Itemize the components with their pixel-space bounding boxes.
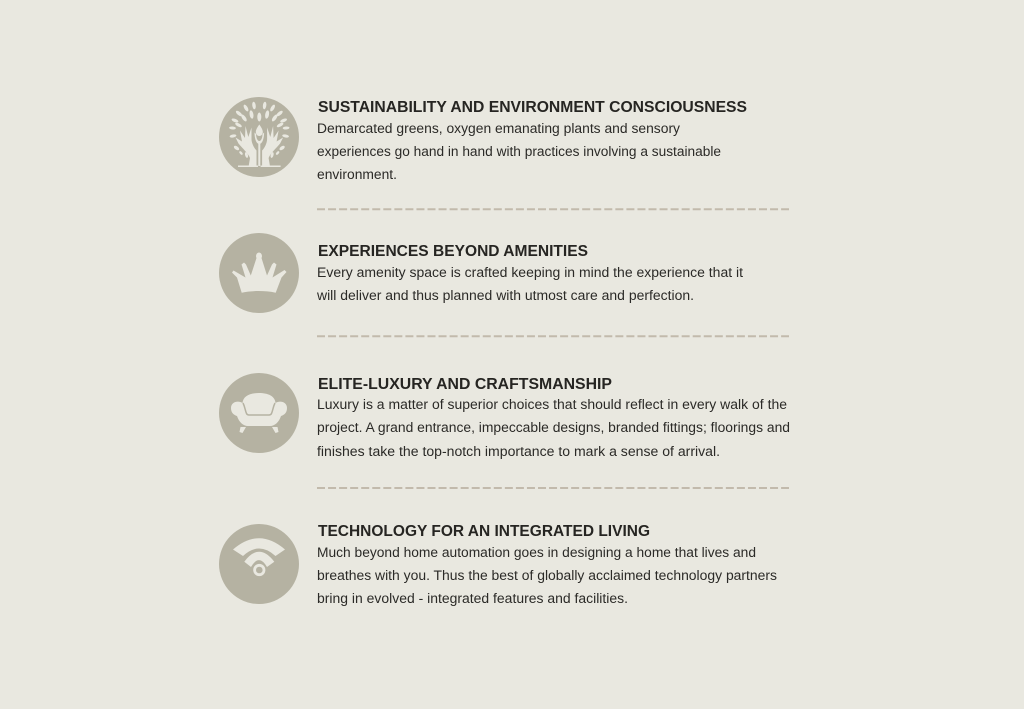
body text: Luxury is a matter of superior choices that should reflect in every walk of the: [317, 397, 787, 412]
body text: will deliver and thus planned with utmost care and perfection.: [316, 288, 694, 303]
panel: craftsmanship: [219, 373, 790, 459]
heading: TECHNOLOGY FOR AN INTEGRATED LIVING: [318, 523, 650, 540]
body text: Every amenity space is crafted keeping in mind the experience that it: [317, 265, 743, 280]
icon: wifi: [219, 524, 299, 604]
body text: [316, 265, 743, 303]
heading: ELITE-LUXURY AND CRAFTSMANSHIP: [318, 376, 612, 393]
body text: [317, 545, 777, 606]
body text: bring in evolved - integrated features and facilities.: [317, 591, 628, 606]
body text: [317, 397, 790, 459]
body text: experiences go hand in hand with practices involving a sustainable: [317, 144, 721, 159]
panel: experiences: [219, 233, 743, 313]
body text: finishes take the top-notch importance to mark a sense of arrival.: [317, 444, 720, 459]
icon: crown: [219, 233, 299, 313]
panel: technology: [219, 523, 777, 606]
panel: sustainability: [219, 97, 747, 182]
body text: project. A grand entrance, impeccable designs, branded fittings; floorings and: [317, 420, 790, 435]
body text: Much beyond home automation goes in designing a home that lives and: [317, 545, 756, 560]
body text: [317, 121, 721, 182]
body text: Demarcated greens, oxygen emanating plants and sensory: [317, 121, 680, 136]
body text: breathes with you. Thus the best of globally acclaimed technology partners: [317, 568, 777, 583]
heading: SUSTAINABILITY AND ENVIRONMENT CONSCIOUSNESS: [318, 99, 747, 116]
body text: environment.: [317, 167, 397, 182]
icon: armchair: [219, 373, 299, 453]
icon: tree and hands: [219, 97, 299, 177]
heading: EXPERIENCES BEYOND AMENITIES: [318, 243, 588, 260]
